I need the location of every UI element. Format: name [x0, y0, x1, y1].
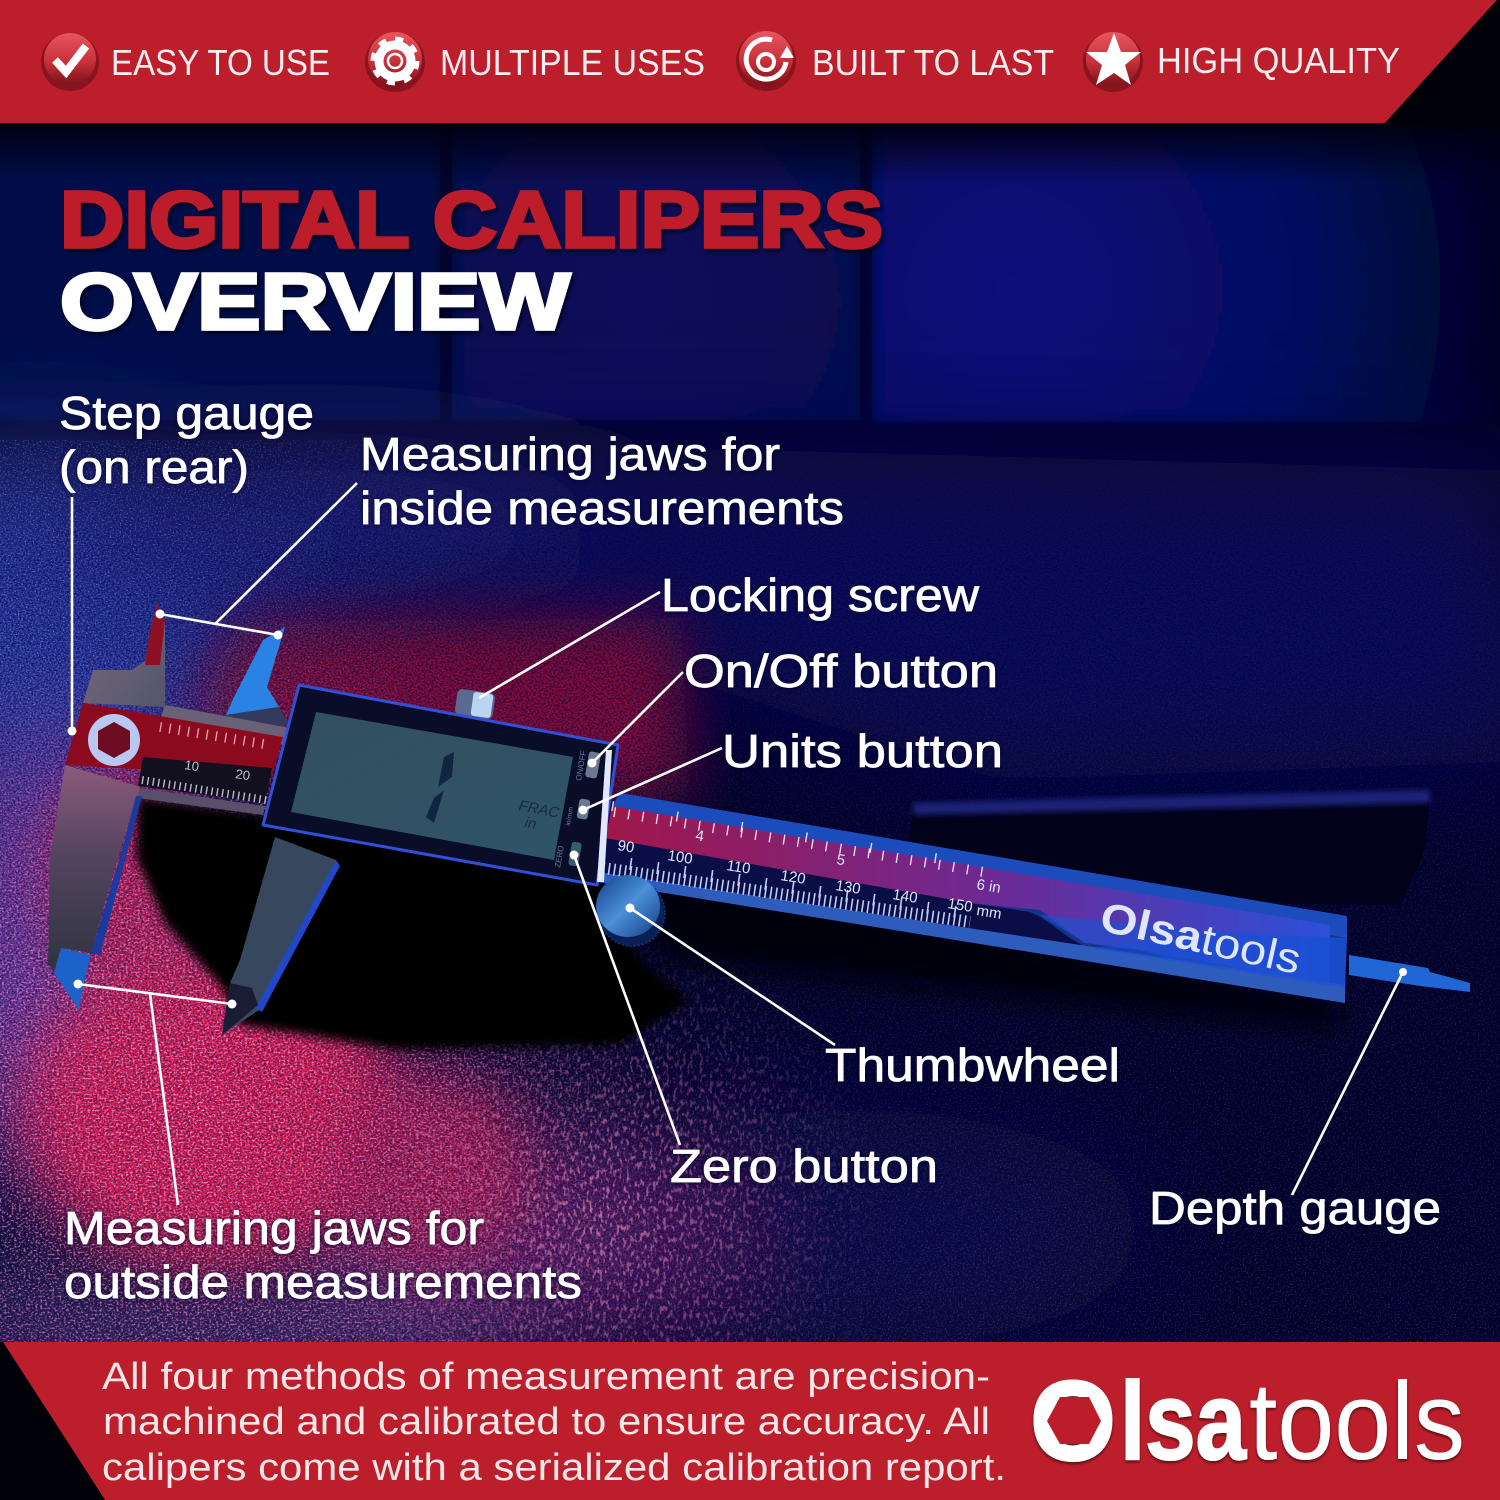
- mm numbers: 90: [616, 837, 636, 857]
- purple red band: [605, 806, 1330, 985]
- blue right end: [1090, 935, 1347, 988]
- label: thumbwheel: Thumbwheel: [825, 1039, 1120, 1091]
- brand logo: tools: [1249, 1360, 1465, 1483]
- footer text: [102, 1356, 1006, 1489]
- dark ruler: [138, 757, 272, 803]
- label: outside jaws: outside measurements: [64, 1256, 582, 1308]
- mm numbers: 5: [835, 851, 846, 869]
- mm numbers: 4: [694, 827, 705, 845]
- lcd labels: FRAC: [517, 797, 561, 822]
- feature: built to last: [736, 31, 1054, 91]
- label: inside jaws: Measuring jaws for: [360, 428, 780, 480]
- blue top strip: [612, 793, 1347, 938]
- feature: multiple uses: [365, 32, 705, 92]
- left beam: 20: [235, 766, 251, 783]
- leader lines and dots: [68, 483, 1407, 1205]
- body shadow: [136, 797, 690, 1050]
- mm numbers: mm: [975, 902, 1003, 923]
- mm numbers: 150: [946, 895, 974, 916]
- black block behind caliper: [136, 790, 1430, 1050]
- feature: easy to use: EASY TO USE: [111, 42, 330, 83]
- footer text: All four methods of measurement are precision-: [102, 1356, 990, 1398]
- gray lower edge: [130, 787, 265, 815]
- title: DIGITAL CALIPERS: [60, 175, 883, 264]
- buttons: ON/OFF: [574, 750, 588, 781]
- title: OVERVIEW: [60, 257, 571, 346]
- display housing: [263, 685, 618, 885]
- mm numbers: 120: [779, 867, 807, 888]
- brand logo: O: [1031, 1360, 1115, 1483]
- feature: high quality: HIGH QUALITY: [1157, 40, 1400, 81]
- wall panels: [0, 110, 1500, 422]
- label: step gauge: [59, 387, 314, 493]
- caliper illustration: [48, 603, 1470, 1035]
- fixed lower jaw: [48, 765, 140, 973]
- label: locking screw: Locking screw: [661, 569, 980, 621]
- brand logo: lsa: [1120, 1360, 1247, 1483]
- main scale bar: [597, 793, 1347, 1003]
- blue bottom strip: [597, 872, 1345, 1003]
- label: inside jaws: [360, 428, 844, 534]
- left beam: [48, 603, 340, 1035]
- label: step gauge: Step gauge: [59, 387, 314, 439]
- label: depth gauge: Depth gauge: [1149, 1182, 1441, 1234]
- ruler ticks mm: [603, 806, 990, 922]
- thumbwheel: [596, 875, 665, 946]
- footer text: machined and calibrated to ensure accuracy. All: [103, 1401, 990, 1443]
- label: units button: Units button: [722, 725, 1003, 777]
- label: on/off button: On/Off button: [684, 645, 998, 697]
- mm numbers: 130: [834, 877, 862, 898]
- feature: multiple uses: MULTIPLE USES: [440, 42, 705, 83]
- brand logo: [1031, 1360, 1465, 1483]
- lcd digit: [426, 752, 454, 823]
- dark mm scale: [600, 838, 1088, 948]
- left beam: 10: [184, 757, 200, 774]
- hex ring: [88, 714, 140, 766]
- buttons: in/mm: [565, 806, 575, 826]
- lcd screen: [291, 712, 573, 860]
- feature: built to last: BUILT TO LAST: [812, 42, 1054, 83]
- feature: high quality: [1083, 32, 1400, 92]
- footer text: calipers come with a serialized calibration report.: [102, 1447, 1006, 1489]
- fabric weave texture: [0, 400, 1500, 1345]
- buttons: ZERO: [553, 845, 566, 868]
- bottom band: [0, 1342, 1500, 1500]
- mm numbers: 6 in: [975, 876, 1002, 897]
- depth rod: [1349, 955, 1470, 992]
- display housing: in: [523, 814, 538, 833]
- mm numbers: [616, 827, 1003, 923]
- feature: easy to use: [41, 33, 330, 91]
- mm numbers: 140: [891, 886, 919, 907]
- moving upper jaw: [226, 627, 285, 715]
- gray top edge: [160, 705, 290, 745]
- label: outside jaws: [64, 1202, 582, 1308]
- locking screw: [454, 688, 496, 720]
- mm numbers: 110: [725, 857, 752, 878]
- title: [60, 175, 883, 346]
- fabric glow: [0, 450, 1500, 1390]
- scale brand: Olsatools: [1096, 893, 1305, 983]
- fixed upper jaw: [83, 603, 165, 707]
- mm numbers: 100: [666, 847, 694, 868]
- red strip: [65, 703, 283, 777]
- label: inside jaws: inside measurements: [360, 482, 844, 534]
- label: zero button: Zero button: [670, 1140, 938, 1192]
- buttons: [553, 750, 601, 868]
- label: outside jaws: Measuring jaws for: [64, 1202, 484, 1254]
- label: step gauge: (on rear): [59, 441, 249, 493]
- moving lower jaw: [222, 837, 336, 1035]
- top band: [0, 0, 1500, 130]
